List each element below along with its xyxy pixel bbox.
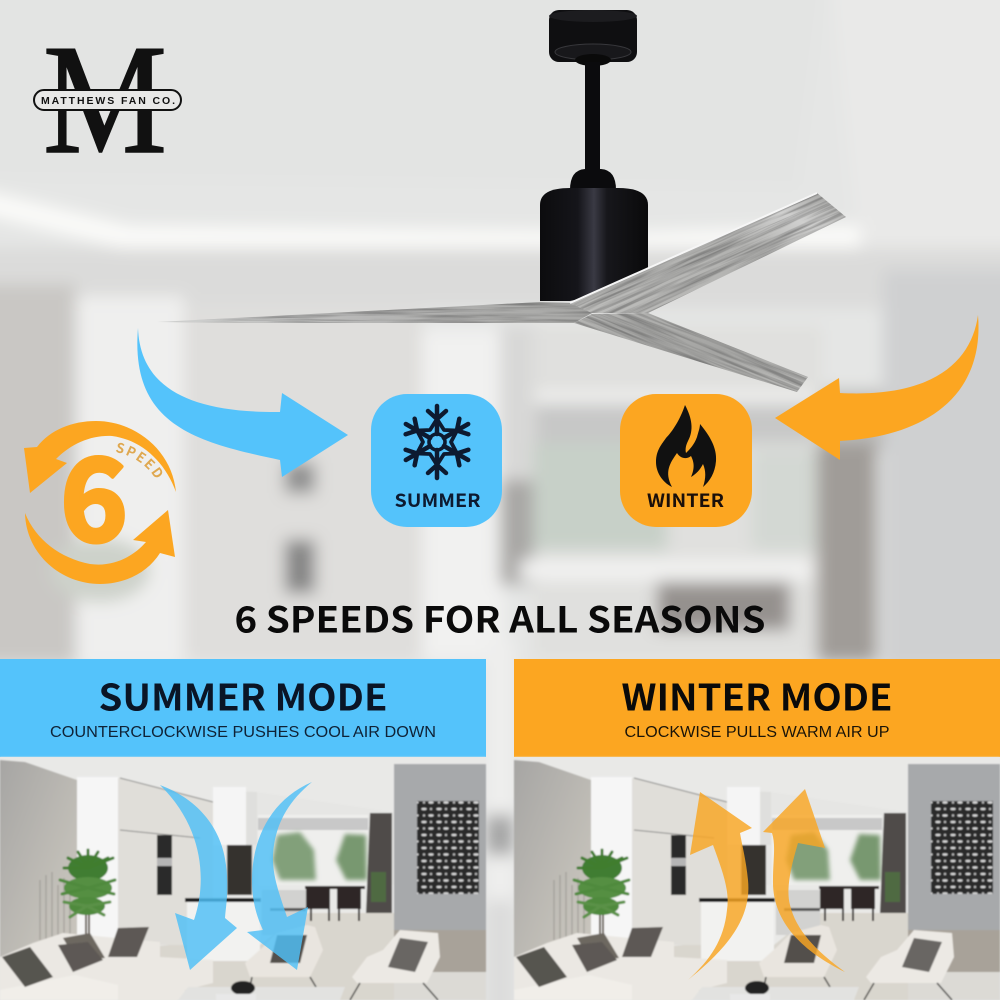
- winter room photo: [514, 757, 1000, 1000]
- summer tile: [371, 394, 502, 527]
- icon: snowflake: [401, 406, 473, 478]
- arrow: orange curved arrow to winter: [775, 315, 979, 460]
- main title: 6 SPEEDS FOR ALL SEASONS: [234, 592, 766, 644]
- winter header bar: [514, 659, 1000, 757]
- winter tile: [620, 394, 752, 527]
- fan blades: [160, 192, 846, 392]
- winter label: WINTER: [647, 487, 724, 513]
- bottom rotation arrow: [25, 510, 175, 584]
- arrow: blue curved arrow to summer: [137, 328, 348, 477]
- logo: Matthews Fan Co.: M: [43, 12, 167, 186]
- numeral 6: 6: [60, 409, 128, 574]
- summer label: SUMMER: [394, 487, 481, 513]
- icon: flame: [656, 405, 716, 487]
- ceiling fan: [160, 10, 846, 392]
- panel: winter mode: [514, 659, 1000, 1000]
- top rotation arrow: [24, 421, 176, 493]
- panel: summer mode: [0, 659, 486, 1000]
- motor housing: [540, 169, 648, 301]
- speed label: SPEED: [116, 442, 162, 478]
- winter description: CLOCKWISE PULLS WARM AIR UP: [624, 724, 890, 741]
- summer heading: SUMMER MODE: [98, 668, 388, 722]
- fan canopy: [549, 10, 637, 66]
- summer description: COUNTERCLOCKWISE PUSHES COOL AIR DOWN: [50, 724, 436, 741]
- logo: Matthews Fan Co.: MATTHEWS FAN CO.: [41, 95, 175, 107]
- 6 speed icon: [24, 409, 176, 584]
- winter airflow arrows: [688, 789, 845, 980]
- winter heading: WINTER MODE: [622, 668, 892, 722]
- downrod: [585, 62, 600, 172]
- summer header bar: [0, 659, 486, 757]
- summer room photo: [0, 757, 486, 1000]
- summer airflow arrows: [160, 782, 312, 970]
